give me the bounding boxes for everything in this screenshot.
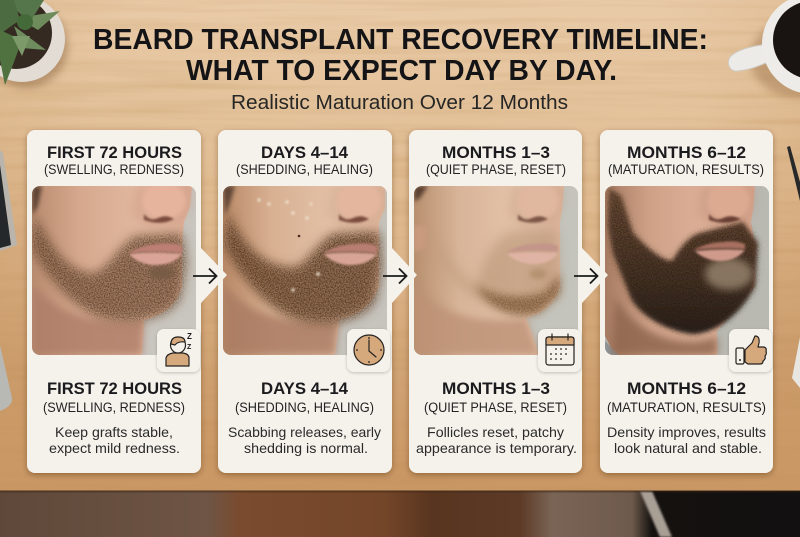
bottom heading: (MATURATION, RESULTS) [607, 400, 766, 415]
description: look natural and stable. [614, 440, 762, 456]
title [93, 24, 708, 87]
icon: sleeping person [157, 329, 200, 372]
top heading: (MATURATION, RESULTS) [608, 162, 764, 177]
top heading [608, 143, 764, 177]
bottom heading [43, 379, 185, 415]
description [607, 424, 766, 456]
panel: days 4-14 [218, 130, 392, 473]
bottom heading: (SWELLING, REDNESS) [43, 400, 185, 415]
white object at lower right [792, 337, 800, 388]
arrow: stage 3 to stage 4 [574, 248, 608, 303]
bottom heading: MONTHS 1–3 [442, 379, 550, 398]
arrow: stage 1 to stage 2 [193, 248, 227, 303]
bottom heading [607, 379, 766, 415]
pen at right edge [787, 146, 800, 201]
description: appearance is temporary. [416, 440, 577, 456]
coffee mug [728, 0, 800, 98]
photo: swollen, red stubble [32, 182, 196, 355]
icon: sleeping person: Z [187, 344, 192, 351]
icon: calendar [538, 329, 581, 372]
description: expect mild redness. [49, 440, 180, 456]
bottom heading: DAYS 4–14 [261, 379, 349, 398]
bottom heading: (SHEDDING, HEALING) [235, 400, 374, 415]
top heading [236, 143, 373, 177]
top heading: (SHEDDING, HEALING) [236, 162, 373, 177]
photo: patchy quiet phase [414, 182, 578, 355]
top heading: MONTHS 1–3 [442, 143, 550, 162]
title: WHAT TO EXPECT DAY BY DAY. [186, 55, 617, 87]
panel: months 6-12 [600, 130, 773, 473]
description: Scabbing releases, early [228, 424, 381, 440]
photo: full mature beard [605, 182, 769, 355]
title: BEARD TRANSPLANT RECOVERY TIMELINE: [93, 24, 708, 56]
description [49, 424, 180, 456]
top heading: FIRST 72 HOURS [47, 143, 182, 162]
panel: months 1-3 [409, 130, 582, 473]
top heading: MONTHS 6–12 [627, 143, 746, 162]
bottom heading [235, 379, 374, 415]
phone on left edge [0, 150, 17, 251]
top heading: DAYS 4–14 [261, 143, 349, 162]
description: Keep grafts stable, [55, 424, 173, 440]
bottom heading: (QUIET PHASE, RESET) [424, 400, 567, 415]
icon: clock [347, 329, 390, 372]
icon: thumbs up [729, 329, 772, 372]
icon: sleeping person: Z [187, 332, 192, 341]
photo: shedding and scabs [223, 182, 387, 355]
top heading: (QUIET PHASE, RESET) [426, 162, 566, 177]
plant in white pot [0, 0, 68, 88]
arrow: stage 2 to stage 3 [383, 248, 417, 303]
top heading [426, 143, 566, 177]
top heading: (SWELLING, REDNESS) [44, 162, 184, 177]
subtitle: Realistic Maturation Over 12 Months [231, 92, 568, 114]
description: Follicles reset, patchy [427, 424, 564, 440]
bottom heading [424, 379, 567, 415]
description: Density improves, results [607, 424, 766, 440]
panel: first 72 hours [27, 130, 201, 473]
bottom heading: FIRST 72 HOURS [47, 379, 182, 398]
top heading [44, 143, 184, 177]
notebook corner at lower left [0, 345, 12, 411]
bottom heading: MONTHS 6–12 [627, 379, 746, 398]
description: shedding is normal. [244, 440, 368, 456]
description [416, 424, 577, 456]
floor below desk [0, 490, 800, 537]
description [228, 424, 381, 456]
